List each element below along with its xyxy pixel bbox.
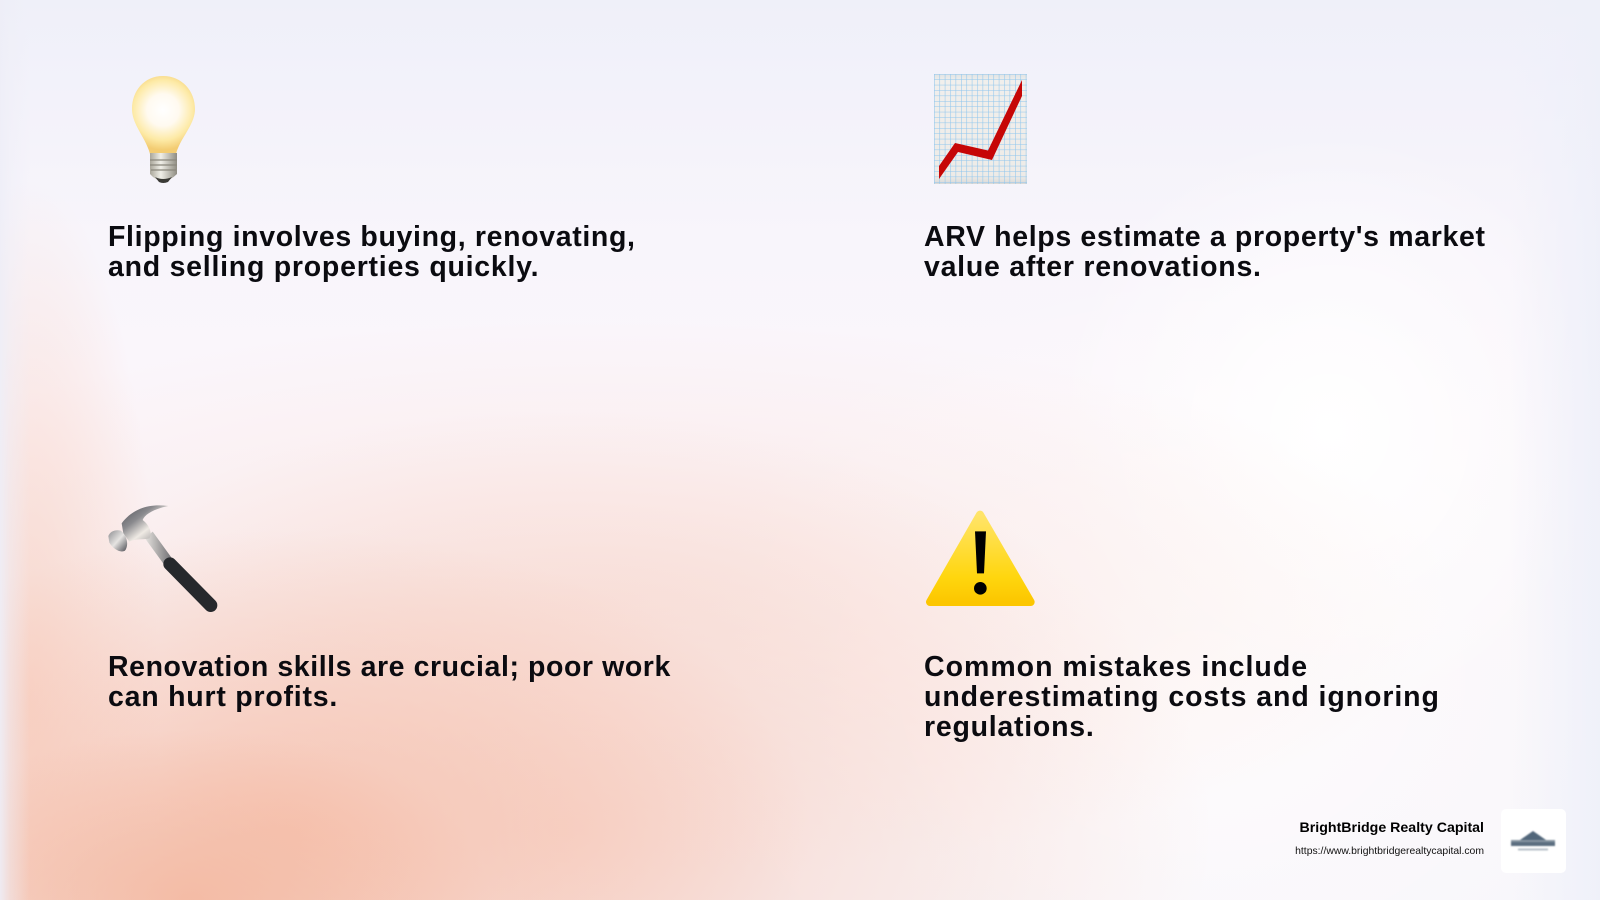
icon: logo roof bbox=[1510, 830, 1556, 852]
icon: hammer bbox=[108, 505, 218, 612]
logo tile bbox=[1501, 809, 1566, 873]
icon: light bulb bbox=[132, 76, 195, 183]
text: mistakes: Common mistakes include bbox=[924, 650, 1308, 682]
text: mistakes bbox=[924, 650, 1440, 742]
text: renovation: can hurt profits. bbox=[108, 680, 338, 712]
text: ARV: value after renovations. bbox=[924, 250, 1262, 282]
text: mistakes: underestimating costs and ignoring bbox=[924, 680, 1440, 712]
text: renovation: Renovation skills are crucial; poor work bbox=[108, 650, 671, 682]
icon: warning sign bbox=[926, 510, 1035, 606]
text: flipping: Flipping involves buying, renovating, bbox=[108, 220, 636, 252]
text: renovation bbox=[108, 650, 671, 712]
company name: BrightBridge Realty Capital bbox=[1300, 820, 1484, 836]
text: flipping bbox=[108, 220, 636, 282]
text: flipping: and selling properties quickly. bbox=[108, 250, 539, 282]
text: ARV bbox=[924, 220, 1486, 282]
footer brand bbox=[1295, 809, 1566, 873]
website url: https://www.brightbridgerealtycapital.com bbox=[1295, 846, 1484, 857]
text: mistakes: regulations. bbox=[924, 710, 1095, 742]
icon: chart increasing bbox=[934, 74, 1027, 184]
text: ARV: ARV helps estimate a property's market bbox=[924, 220, 1486, 252]
